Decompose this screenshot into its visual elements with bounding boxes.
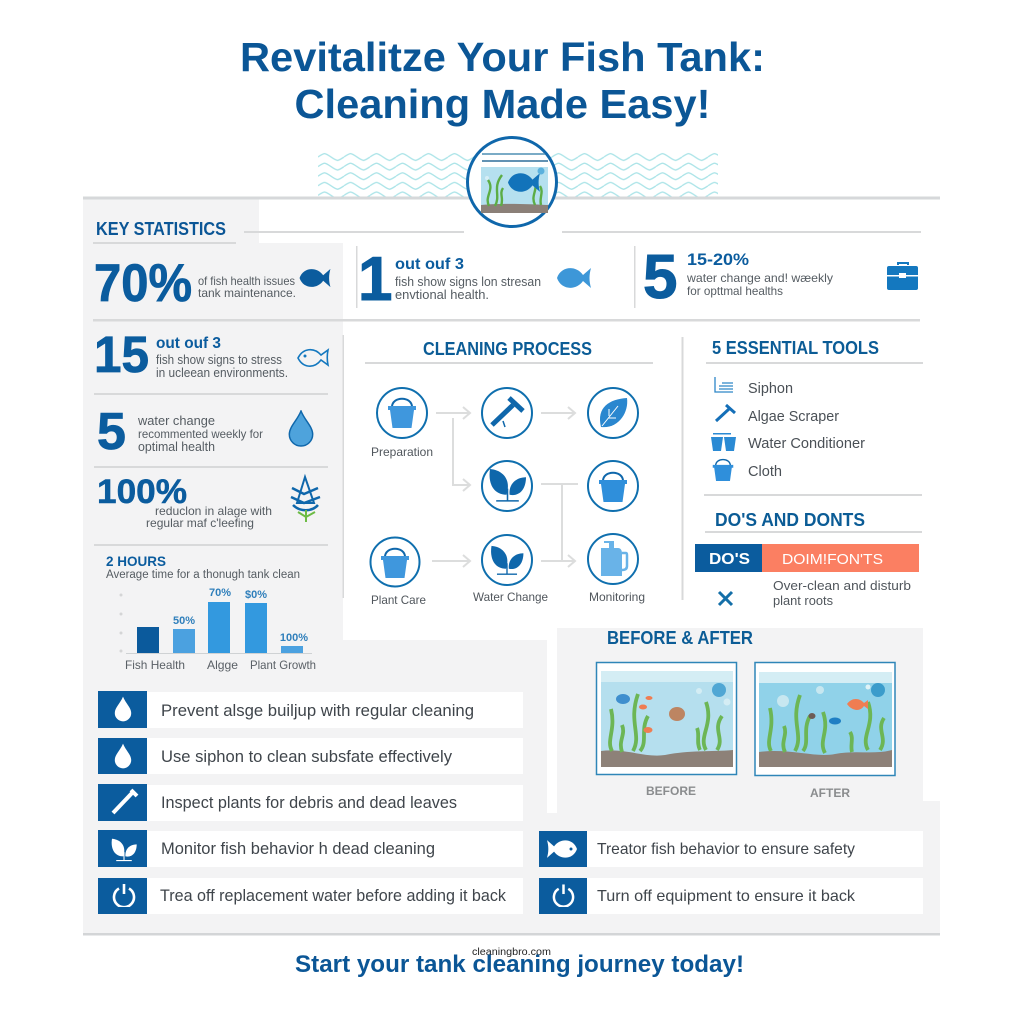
tool labels xyxy=(748,381,865,480)
stat: 70%: tank maintenance. xyxy=(198,286,296,300)
tip labels: Use siphon to clean subsfate effectively xyxy=(161,747,452,766)
stat: 2 hours: 2 HOURS xyxy=(106,553,166,569)
tip labels: Monitor fish behavior h dead cleaning xyxy=(161,839,435,858)
stat: 5 water change: 5 xyxy=(97,403,126,461)
tip labels: Inspect plants for debris and dead leaves xyxy=(161,793,457,812)
stat: 5 / 15-20% xyxy=(643,243,833,312)
bar chart xyxy=(120,587,316,672)
icon: bucket three xyxy=(381,549,409,578)
step labels: Monitoring xyxy=(589,590,645,604)
icon: sprout white xyxy=(112,839,137,861)
panel: dos and donts: DOIM!FON'TS xyxy=(782,551,883,568)
background panels xyxy=(83,198,940,934)
panel: before and after xyxy=(596,628,895,800)
stat: 15 out of 3: in ucleean environments. xyxy=(156,366,288,380)
wave pattern band xyxy=(318,152,718,198)
stat: 15 out of 3: fish show signs to stress xyxy=(156,353,282,367)
tool labels: Cloth xyxy=(748,464,782,480)
bar chart: $0% xyxy=(245,589,267,601)
title: Revitalitze Your Fish Tank: xyxy=(240,34,765,80)
bar chart: 50% xyxy=(173,615,195,627)
icon: jug xyxy=(601,541,627,576)
panel: essential tools xyxy=(706,338,923,481)
stat: 15 out of 3: out ouf 3 xyxy=(156,335,221,352)
stat: 5 / 15-20%: water change and! wæekly xyxy=(686,271,833,285)
stat: 70%: 70% xyxy=(94,254,192,313)
heading: key statistics: KEY STATISTICS xyxy=(96,219,226,239)
source credit: cleaningbro.com xyxy=(472,947,551,958)
icon: leaf xyxy=(600,398,627,427)
icon: aquarium medallion xyxy=(468,138,556,226)
panel: dos and donts: plant roots xyxy=(773,594,833,608)
stat: 2 hours xyxy=(106,553,300,581)
icon: bucket xyxy=(388,399,416,428)
panel: dos and donts xyxy=(695,510,922,608)
tip labels: Treator fish behavior to ensure safety xyxy=(597,841,855,858)
icon: cross xyxy=(719,592,732,605)
stat: 15 out of 3 xyxy=(94,326,328,383)
panel: essential tools: 5 ESSENTIAL TOOLS xyxy=(712,338,879,358)
stat: 100% xyxy=(97,473,272,530)
icon: drop one xyxy=(115,697,131,721)
panel: before and after: BEFORE xyxy=(646,784,696,798)
stat: 1 out of 3: envtional health. xyxy=(395,288,489,302)
tip labels: Prevent alsge builjup with regular cleaning xyxy=(161,701,474,720)
tool labels: Algae Scraper xyxy=(748,409,839,425)
tip labels: Trea off replacement water before adding it back xyxy=(160,886,506,905)
icon: scraper white xyxy=(113,790,137,813)
stat: 100%: 100% xyxy=(97,473,187,511)
bar chart: 70% xyxy=(209,587,231,599)
panel: cleaning process xyxy=(365,339,653,607)
icon: power two xyxy=(554,884,573,907)
panel: dos and donts: DO'S AND DONTS xyxy=(715,510,865,530)
panel: dos and donts: Over-clean and disturb xyxy=(773,579,911,593)
icon: conditioner xyxy=(711,433,736,451)
stat: 5 water change xyxy=(97,403,313,461)
stat: 5 / 15-20%: 15-20% xyxy=(687,251,749,269)
step labels xyxy=(371,445,645,607)
stat: 100%: reduclon in alage with xyxy=(155,504,272,518)
icon: plant xyxy=(490,469,526,501)
bar chart: Fish Health xyxy=(125,658,185,672)
panel: dos and donts: DO'S xyxy=(709,551,750,568)
tool labels: Siphon xyxy=(748,381,793,397)
tip labels xyxy=(160,701,856,905)
step labels: Water Change xyxy=(473,590,548,604)
icon: siphon xyxy=(715,377,733,392)
stat: 5 / 15-20%: 5 xyxy=(643,243,677,312)
illustration: before tank xyxy=(596,662,736,774)
icon: bucket two xyxy=(599,473,627,502)
footer call to action: Start your tank cleaning journey today! xyxy=(295,951,744,978)
bar chart: Algge xyxy=(207,658,238,672)
stat: 1 out of 3: fish show signs lon stresan xyxy=(395,275,541,289)
icon: sprout xyxy=(491,546,523,574)
bar chart: Plant Growth xyxy=(250,658,316,672)
icon: scraper xyxy=(716,405,735,421)
step labels: Plant Care xyxy=(371,593,426,607)
stat: 70% xyxy=(94,254,330,313)
title: Cleaning Made Easy! xyxy=(294,81,710,127)
icon: water plant xyxy=(291,477,320,522)
stat: 1 out of 3: 1 xyxy=(358,245,392,314)
panel: tips list xyxy=(98,691,923,914)
stat: 100%: regular maf c'leefing xyxy=(146,516,254,530)
tip labels: Turn off equipment to ensure it back xyxy=(597,888,856,905)
stat: 1 out of 3 xyxy=(358,245,591,314)
stat: 1 out of 3: out ouf 3 xyxy=(395,256,464,273)
stat: 5 / 15-20%: for opttmal healths xyxy=(687,284,783,298)
stat: 5 water change: recommented weekly for xyxy=(138,427,263,441)
arrows xyxy=(432,407,578,567)
icon: scraper xyxy=(492,398,523,427)
panel: before and after: BEFORE & AFTER xyxy=(607,628,753,648)
tool labels: Water Conditioner xyxy=(748,436,865,452)
icon: toolbox xyxy=(887,263,918,290)
step labels: Preparation xyxy=(371,445,433,459)
stat: 5 water change: optimal health xyxy=(138,440,215,454)
icon: power one xyxy=(114,884,134,907)
title xyxy=(240,34,765,127)
icon: drop two xyxy=(115,744,131,768)
illustration: after tank xyxy=(755,662,895,776)
heading: cleaning process: CLEANING PROCESS xyxy=(423,339,592,359)
stat: 2 hours: Average time for a thonugh tank clean xyxy=(106,569,300,581)
icon: fish white xyxy=(547,840,577,858)
stat: 70%: of fish health issues xyxy=(198,274,295,288)
step circles xyxy=(370,388,638,586)
icon: cloth bucket xyxy=(713,460,733,481)
stat: 15 out of 3: 15 xyxy=(94,326,149,383)
stat: 5 water change: water change xyxy=(137,413,215,428)
panel: before and after: AFTER xyxy=(810,786,850,800)
bar chart: 100% xyxy=(280,632,308,644)
